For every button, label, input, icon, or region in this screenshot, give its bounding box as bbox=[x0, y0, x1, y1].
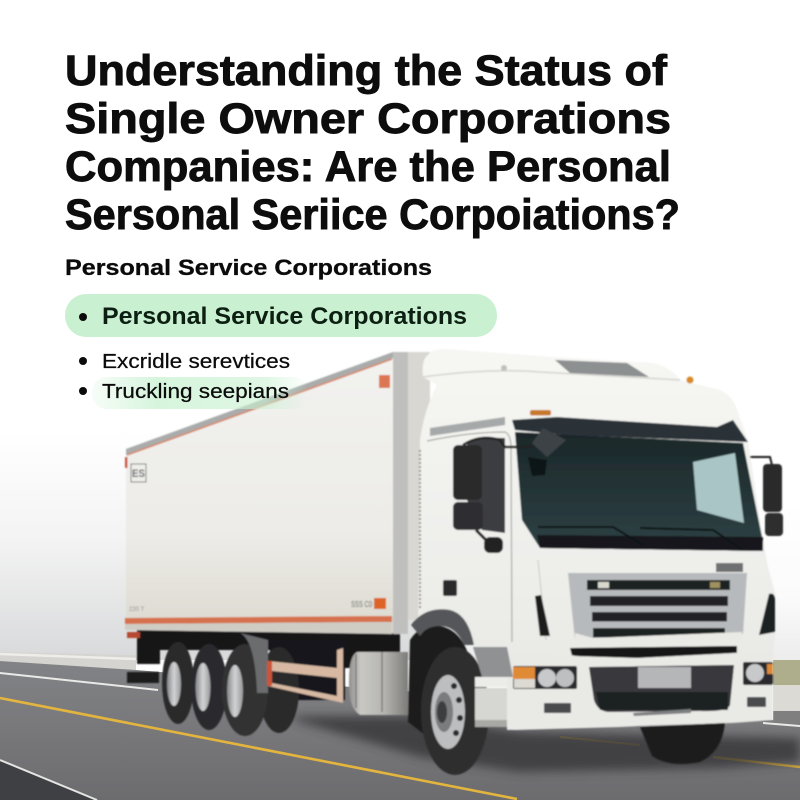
highlighted pill: Personal Service Corporations: Personal Service Corporations bbox=[102, 303, 467, 330]
cab vents bbox=[535, 594, 775, 636]
fuel tank bbox=[349, 652, 408, 715]
box markings bbox=[129, 464, 386, 613]
road markings bbox=[0, 673, 800, 800]
right mirror bbox=[750, 457, 783, 536]
box markings: 220 T bbox=[129, 607, 145, 613]
title: Companies: Are the Personal bbox=[65, 144, 671, 191]
cab body bbox=[418, 349, 775, 730]
title: Understanding the Status of bbox=[65, 48, 668, 95]
cargo box bbox=[125, 352, 430, 634]
headlights bbox=[513, 662, 773, 713]
windshield bbox=[512, 417, 763, 551]
front grille bbox=[568, 563, 747, 648]
roof hatch bbox=[555, 360, 649, 377]
road shadow bbox=[290, 716, 800, 772]
side guard bbox=[267, 648, 343, 703]
front bumper bbox=[507, 646, 773, 730]
box markings: SSS C0 bbox=[351, 600, 372, 609]
title: Sersonal Seriice Corpoiations? bbox=[65, 192, 680, 239]
list item: Truckling seepians bbox=[79, 377, 308, 409]
list item: Truckling seepians: Truckling seepians bbox=[102, 381, 289, 403]
box markings: ES bbox=[132, 468, 145, 480]
road scene bbox=[0, 652, 800, 800]
side window bbox=[467, 438, 505, 533]
highlighted pill: Personal Service Corporations bbox=[65, 294, 497, 337]
title bbox=[65, 48, 680, 239]
title: Single Owner Corporations bbox=[65, 96, 671, 143]
door lines bbox=[427, 432, 512, 642]
front wheel bbox=[408, 609, 489, 775]
subheading: Personal Service Corporations bbox=[65, 255, 432, 280]
list item: Excridle serevtices: Excridle serevtices bbox=[102, 351, 290, 373]
door handle bbox=[443, 580, 457, 596]
left mirror bbox=[453, 428, 566, 553]
side stripe bbox=[430, 417, 505, 436]
rear chassis bbox=[127, 630, 400, 700]
rear wheels bbox=[162, 633, 299, 736]
marker lights bbox=[501, 365, 694, 416]
front right wheel bbox=[640, 723, 725, 764]
truck bbox=[125, 349, 783, 775]
step and mudguard bbox=[473, 647, 513, 727]
